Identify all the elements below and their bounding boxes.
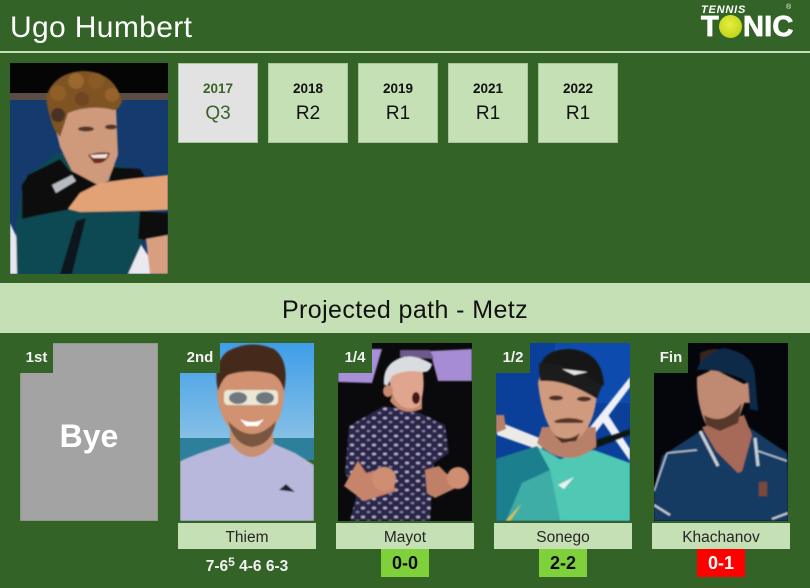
history: 2019: 2019	[383, 81, 413, 96]
score: Khachanov	[697, 549, 745, 577]
title: Ugo Humbert	[10, 11, 192, 44]
round 1: bye panel: Bye	[60, 418, 118, 454]
header rule	[0, 51, 810, 53]
round 1: bye panel	[20, 343, 158, 521]
name: Khachanov	[652, 523, 790, 549]
round badge: 1/2: 1/2	[503, 349, 523, 366]
round badge: 2nd: 2nd	[187, 349, 213, 366]
logo: Tennis Tonic: TENNIS	[701, 4, 746, 16]
name: Mayot	[336, 523, 474, 549]
name: Thiem	[178, 523, 316, 549]
round badge: 1/4	[338, 343, 372, 373]
name: Thiem: Thiem	[225, 529, 269, 546]
player photo: Khachanov	[654, 343, 788, 521]
history: 2019	[358, 63, 438, 143]
history: 2022: R1	[566, 103, 590, 124]
logo: Tennis Tonic: T	[701, 11, 719, 43]
history: 2017	[178, 63, 258, 143]
score: Sonego	[539, 549, 587, 577]
score: Khachanov: 0-1	[708, 553, 734, 573]
name: Sonego	[494, 523, 632, 549]
section heading band	[0, 283, 810, 333]
history: 2018: R2	[296, 103, 320, 124]
round badge: 1/2	[496, 343, 530, 373]
name: Sonego: Sonego	[536, 529, 590, 546]
history: 2022	[538, 63, 618, 143]
score: Sonego: 2-2	[550, 553, 576, 573]
round badge: Fin	[654, 343, 688, 373]
name: Khachanov: Khachanov	[682, 529, 760, 546]
player photo: Mayot	[338, 343, 472, 521]
history: 2017: Q3	[205, 103, 231, 124]
logo: Tennis Tonic	[700, 4, 794, 43]
section heading band: Projected path - Metz	[282, 296, 528, 324]
history: 2019: R1	[386, 103, 410, 124]
history: 2021: R1	[476, 103, 500, 124]
round badge: 1/4: 1/4	[345, 349, 365, 366]
player photo: Ugo Humbert	[10, 63, 168, 274]
score: Mayot	[381, 549, 429, 577]
round badge: Fin: Fin	[660, 349, 682, 366]
history: 2018: 2018	[293, 81, 323, 96]
round badge: 2nd	[180, 343, 220, 373]
history: 2021: 2021	[473, 81, 503, 96]
history: 2018	[268, 63, 348, 143]
player photo: Sonego	[496, 343, 630, 521]
round badge: 1st: 1st	[26, 349, 47, 366]
name: Mayot: Mayot	[384, 529, 426, 546]
score: Thiem: 7-65 4-6 6-3	[206, 555, 288, 575]
logo: Tennis Tonic: NIC	[743, 11, 794, 43]
history: 2022: 2022	[563, 81, 593, 96]
round badge: 1st	[20, 343, 53, 373]
logo: Tennis Tonic: ®	[786, 4, 791, 11]
score: Mayot: 0-0	[392, 553, 418, 573]
player photo: Thiem	[180, 343, 314, 521]
history: 2021	[448, 63, 528, 143]
history: 2017: 2017	[203, 81, 233, 96]
